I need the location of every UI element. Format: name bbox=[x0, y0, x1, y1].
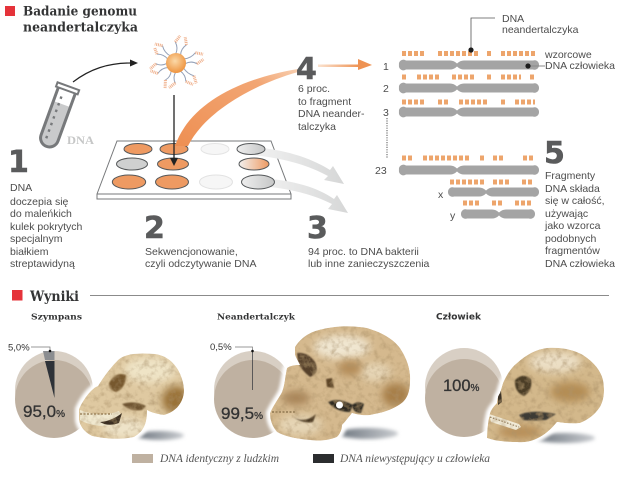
callout: wzorcowe DNA człowieka: wzorcowe bbox=[544, 49, 592, 61]
panel: Człowiek bbox=[425, 312, 606, 445]
orange arc to step 4 bbox=[175, 69, 298, 146]
wells bbox=[112, 144, 274, 189]
step 2: Sekwencjonowanie, bbox=[145, 246, 238, 258]
callout: DNA neandertalczyka bbox=[468, 13, 579, 53]
step 1: doczepia się bbox=[10, 196, 69, 208]
step 1: do maleńkich bbox=[10, 208, 72, 220]
title: Badanie genomu bbox=[23, 4, 137, 20]
panel: Człowiek: Człowiek bbox=[436, 312, 481, 322]
step 5: DNA człowieka bbox=[545, 258, 615, 270]
section heading: Wyniki bbox=[12, 289, 609, 305]
pie chart: Neanderthal: 0,5% bbox=[210, 342, 232, 353]
step 5: podobnych bbox=[545, 233, 597, 245]
callout: wzorcowe DNA człowieka: DNA człowieka bbox=[545, 60, 615, 72]
step 3 bbox=[307, 211, 430, 270]
legend item: identical DNA: DNA identyczny z ludzkim bbox=[159, 453, 279, 465]
chromosome diagram bbox=[375, 13, 615, 222]
step 3: lub inne zanieczyszczenia bbox=[308, 258, 430, 270]
step 1 bbox=[8, 145, 83, 270]
skull: chimpanzee bbox=[75, 350, 190, 442]
title bbox=[5, 4, 139, 36]
step 2 bbox=[144, 211, 256, 270]
step 1: specjalnym bbox=[10, 233, 63, 245]
step 3: 3 bbox=[307, 211, 328, 246]
icon: streptavidin bead bbox=[150, 36, 203, 88]
step 4: 6 proc. bbox=[298, 83, 330, 95]
skull: Neanderthal bbox=[268, 324, 413, 444]
section heading: Wyniki: Wyniki bbox=[29, 289, 79, 305]
arrow: bead to plate bbox=[170, 95, 178, 166]
title: neandertalczyka bbox=[23, 20, 139, 36]
chromosome numbers: y bbox=[450, 210, 456, 222]
pie chart: Neanderthal bbox=[210, 342, 292, 438]
pie chart: chimpanzee: 95,0% bbox=[23, 402, 65, 421]
step 1: streptawidyną bbox=[10, 258, 75, 270]
step 4: talczyka bbox=[298, 121, 336, 133]
pie chart: Neanderthal: 99,5% bbox=[221, 404, 263, 423]
Neanderthal DNA fragments bbox=[402, 54, 535, 203]
step 5: Fragmenty bbox=[545, 170, 596, 182]
step 5 bbox=[544, 136, 615, 270]
chromosome numbers: 1 bbox=[383, 61, 389, 73]
step 4: to fragment bbox=[298, 96, 351, 108]
sequencing plate bbox=[97, 141, 348, 213]
callout: DNA neandertalczyka: neandertalczyka bbox=[502, 24, 579, 36]
step 2: 2 bbox=[144, 211, 165, 246]
panel: Szympans bbox=[8, 312, 190, 442]
panel: Szympans: Szympans bbox=[31, 312, 82, 322]
step 1: kulek pokrytych bbox=[10, 221, 83, 233]
step 1: białkiem bbox=[10, 246, 49, 258]
icon: test tube: DNA bbox=[67, 133, 94, 147]
step 2: czyli odczytywanie DNA bbox=[145, 258, 256, 270]
legend bbox=[132, 453, 490, 465]
chromosome numbers: 2 bbox=[383, 83, 389, 95]
chromosome numbers: 23 bbox=[375, 165, 387, 177]
step 1: 1 bbox=[8, 145, 29, 180]
step 5: 5 bbox=[544, 136, 565, 171]
chromosome numbers: x bbox=[438, 189, 444, 201]
arrow: tube to bead bbox=[73, 60, 138, 82]
icon: test tube bbox=[36, 82, 94, 150]
legend item: DNA absent in humans: DNA niewystępujący u człowieka bbox=[339, 453, 490, 465]
step 4 bbox=[296, 52, 365, 133]
callout: wzorcowe DNA człowieka bbox=[525, 49, 615, 72]
step 5: fragmentów bbox=[545, 245, 600, 257]
step 5: DNA składa bbox=[545, 183, 600, 195]
step 4: 4 bbox=[296, 52, 317, 87]
step 3: 94 proc. to DNA bakterii bbox=[308, 246, 419, 258]
chromosome numbers bbox=[375, 61, 456, 222]
panel: Neandertalczyk: Neandertalczyk bbox=[217, 312, 296, 322]
step 5: jako wzorca bbox=[544, 220, 601, 232]
step 5: używając bbox=[545, 208, 588, 220]
skull: human bbox=[484, 345, 606, 445]
pie chart: chimpanzee bbox=[8, 342, 93, 438]
chromosome numbers: 3 bbox=[383, 107, 389, 119]
grey arrows to contaminants bbox=[252, 147, 348, 213]
step 1: DNA bbox=[10, 182, 32, 194]
step 4: DNA neander- bbox=[298, 108, 365, 120]
pie chart: human bbox=[425, 348, 503, 437]
callout: DNA neandertalczyka: DNA bbox=[502, 13, 524, 25]
pie chart: chimpanzee: 5,0% bbox=[8, 342, 30, 354]
pie chart: human: 100% bbox=[443, 377, 480, 395]
chromosomes bbox=[399, 60, 539, 219]
panel: Neandertalczyk bbox=[210, 312, 413, 444]
arrow: step 4 to chromosomes bbox=[318, 59, 372, 70]
step 5: się w całość, bbox=[545, 195, 605, 207]
